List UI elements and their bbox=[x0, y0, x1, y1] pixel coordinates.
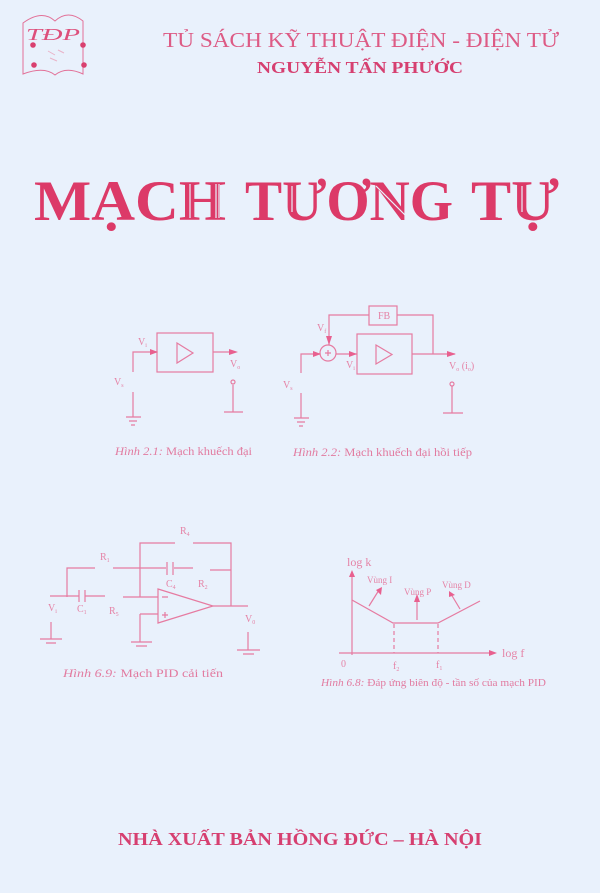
diagram: Hình 2.2 feedback amplifier: V bbox=[449, 361, 456, 372]
diagram: Hình 6.9 PID circuit: 4 bbox=[173, 585, 176, 591]
publisher: NHÀ XUẤT BẢN HỒNG ĐỨC – HÀ NỘI bbox=[118, 828, 482, 849]
diagram: Hình 2.2 feedback amplifier: FB bbox=[378, 311, 391, 322]
caption: Hình 6.9: Hình 6.9: Mạch PID cải tiến bbox=[62, 667, 223, 680]
diagram: Hình 6.9 PID circuit: R bbox=[100, 552, 107, 563]
diagram: Hình 2.1 amplifier: o bbox=[237, 365, 240, 371]
chart: log k versus log f response: f bbox=[436, 660, 439, 671]
diagram: Hình 2.1 amplifier: s bbox=[121, 383, 124, 389]
diagram: Hình 6.9 PID circuit: 1 bbox=[84, 610, 87, 616]
diagram: Hình 2.1 amplifier: V bbox=[230, 359, 237, 370]
diagram: Hình 6.9 PID circuit: 1 bbox=[107, 558, 110, 564]
diagram: Hình 2.1 amplifier: V bbox=[138, 337, 145, 348]
diagram: Hình 2.2 feedback amplifier: (i bbox=[459, 361, 468, 372]
chart: log k versus log f response: Vùng P bbox=[404, 587, 431, 597]
diagram: Hình 6.9 PID circuit: C bbox=[77, 604, 84, 615]
chart: log k versus log f response: Vùng I bbox=[367, 575, 392, 585]
diagram: Hình 6.9 PID circuit: 4 bbox=[187, 532, 190, 538]
chart: log k versus log f response: 1 bbox=[439, 666, 442, 672]
icon: publisher book logo: TĐP bbox=[26, 25, 80, 44]
chart: log k versus log f response: 2 bbox=[396, 667, 399, 673]
diagram: Hình 2.1 amplifier: i bbox=[145, 343, 147, 349]
diagram: Hình 6.9 PID circuit: 0 bbox=[252, 620, 255, 626]
series heading: TỦ SÁCH KỸ THUẬT ĐIỆN - ĐIỆN TỬ bbox=[163, 28, 560, 52]
diagram: Hình 2.2 feedback amplifier: V bbox=[283, 380, 290, 391]
diagram: Hình 6.9 PID circuit: 2 bbox=[205, 585, 208, 591]
diagram: Hình 6.9 PID circuit: R bbox=[180, 526, 187, 537]
diagram: Hình 2.2 feedback amplifier: i bbox=[353, 366, 355, 372]
diagram: Hình 2.1 amplifier bbox=[114, 333, 243, 425]
author: NGUYỄN TẤN PHƯỚC bbox=[257, 58, 463, 77]
diagram: Hình 6.9 PID circuit bbox=[40, 526, 260, 654]
diagram: Hình 6.9 PID circuit: V bbox=[48, 603, 55, 614]
diagram: Hình 2.2 feedback amplifier: V bbox=[346, 360, 353, 371]
diagram: Hình 2.2 feedback amplifier: ) bbox=[471, 361, 474, 372]
diagram: Hình 2.2 feedback amplifier: f bbox=[324, 328, 326, 335]
title: TƯƠNG bbox=[245, 170, 453, 233]
diagram: Hình 6.9 PID circuit: i bbox=[55, 609, 57, 615]
diagram: Hình 2.2 feedback amplifier: V bbox=[317, 323, 324, 334]
chart: log k versus log f response: Vùng D bbox=[442, 580, 471, 590]
caption: Hình 2.2: Hình 2.2: Mạch khuếch đại hồi tiếp bbox=[292, 446, 472, 459]
diagram: Hình 2.1 amplifier: V bbox=[114, 377, 121, 388]
chart: log k versus log f response: log f bbox=[502, 646, 524, 660]
chart: log k versus log f response: f bbox=[393, 661, 396, 672]
diagram: Hình 2.2 feedback amplifier bbox=[283, 306, 474, 426]
diagram: Hình 6.9 PID circuit: C bbox=[166, 579, 173, 590]
title bbox=[34, 170, 559, 233]
diagram: Hình 2.2 feedback amplifier: o bbox=[456, 367, 459, 373]
diagram: Hình 2.2 feedback amplifier: s bbox=[290, 386, 293, 392]
chart: log k versus log f response bbox=[339, 555, 524, 673]
caption: Hình 6.8: Hình 6.8: Đáp ứng biên độ - tần số của mạch PID bbox=[320, 678, 546, 689]
diagram: Hình 2.2 feedback amplifier: o bbox=[468, 367, 471, 373]
diagram: Hình 6.9 PID circuit: V bbox=[245, 614, 252, 625]
diagram: Hình 6.9 PID circuit: R bbox=[109, 606, 116, 617]
diagram: Hình 6.9 PID circuit: 5 bbox=[116, 612, 119, 618]
chart: log k versus log f response: 0 bbox=[341, 659, 346, 670]
chart: log k versus log f response: log k bbox=[347, 555, 371, 569]
caption: Hình 2.1: Hình 2.1: Mạch khuếch đại bbox=[114, 445, 252, 458]
title: TỰ bbox=[471, 170, 559, 233]
title: MẠCH bbox=[34, 170, 226, 233]
icon: publisher book logo bbox=[23, 15, 87, 75]
diagram: Hình 6.9 PID circuit: R bbox=[198, 579, 205, 590]
